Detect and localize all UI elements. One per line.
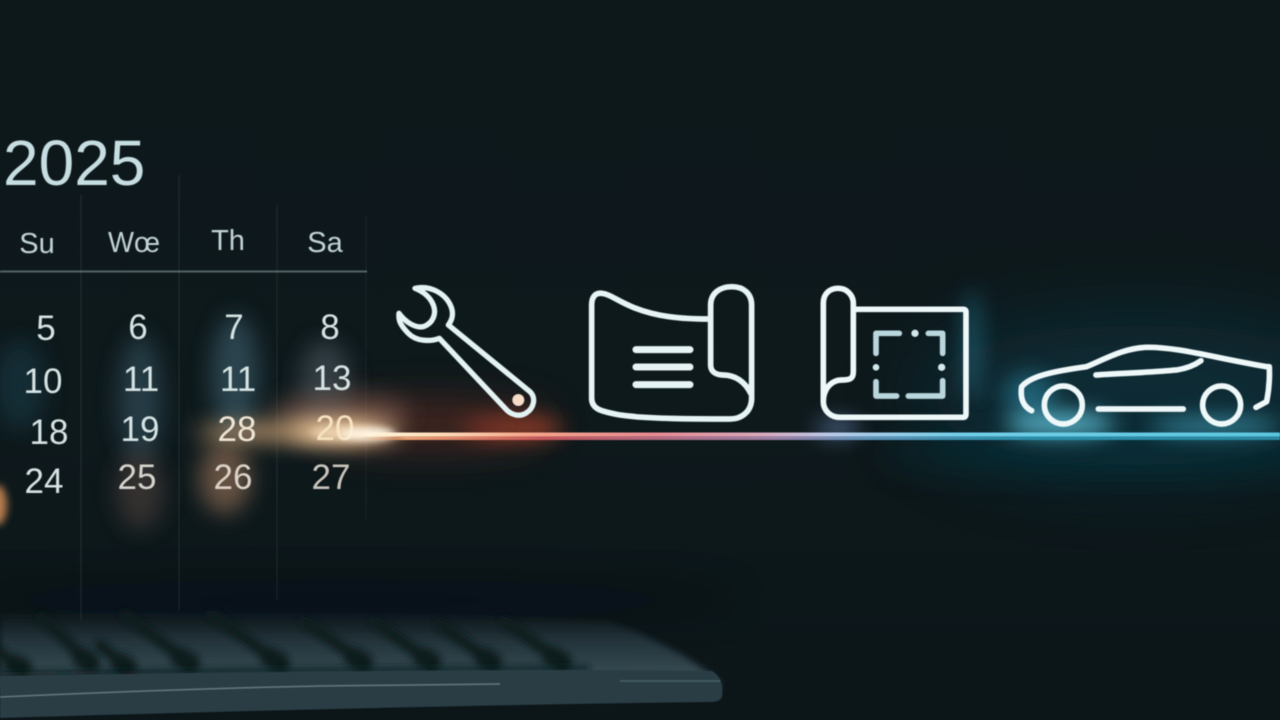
calendar dates: 11 [123,360,159,399]
icon: car [1021,347,1269,424]
keyboard [0,610,723,718]
background glows [0,290,1280,610]
beam hot spot [340,429,396,439]
keyboard front edge [0,670,723,718]
icon: blueprint [823,288,966,417]
calendar dates: 7 [224,308,244,347]
weekday headers: Sa [307,227,344,259]
icon: wrench [399,288,534,415]
calendar dates: 11 [220,360,256,399]
calendar dates: 24 [25,462,63,501]
calendar year heading: 2025 [3,127,145,199]
calendar dates: 27 [312,458,350,497]
calendar dates: 19 [121,410,159,449]
light beam line [340,432,1280,440]
calendar dates: 25 [118,458,156,497]
calendar dates: 18 [30,413,68,452]
weekday headers: Th [211,225,245,257]
weekday headers [19,225,344,260]
keyboard keys [0,610,722,690]
calendar dates: 26 [214,458,252,497]
calendar dates: 13 [313,359,351,398]
calendar dates: 20 [316,409,354,448]
calendar grid lines [0,175,367,620]
calendar dates: 8 [320,308,340,347]
calendar dates: 6 [128,308,148,347]
calendar dates: 28 [218,410,256,449]
calendar dates: 5 [36,309,56,348]
weekday headers: Su [19,228,55,260]
calendar dates [24,308,354,501]
weekday headers: Wœ [108,227,160,259]
calendar dates: 10 [24,362,62,401]
icon: document scroll [592,287,752,419]
light beam flare [195,421,400,443]
